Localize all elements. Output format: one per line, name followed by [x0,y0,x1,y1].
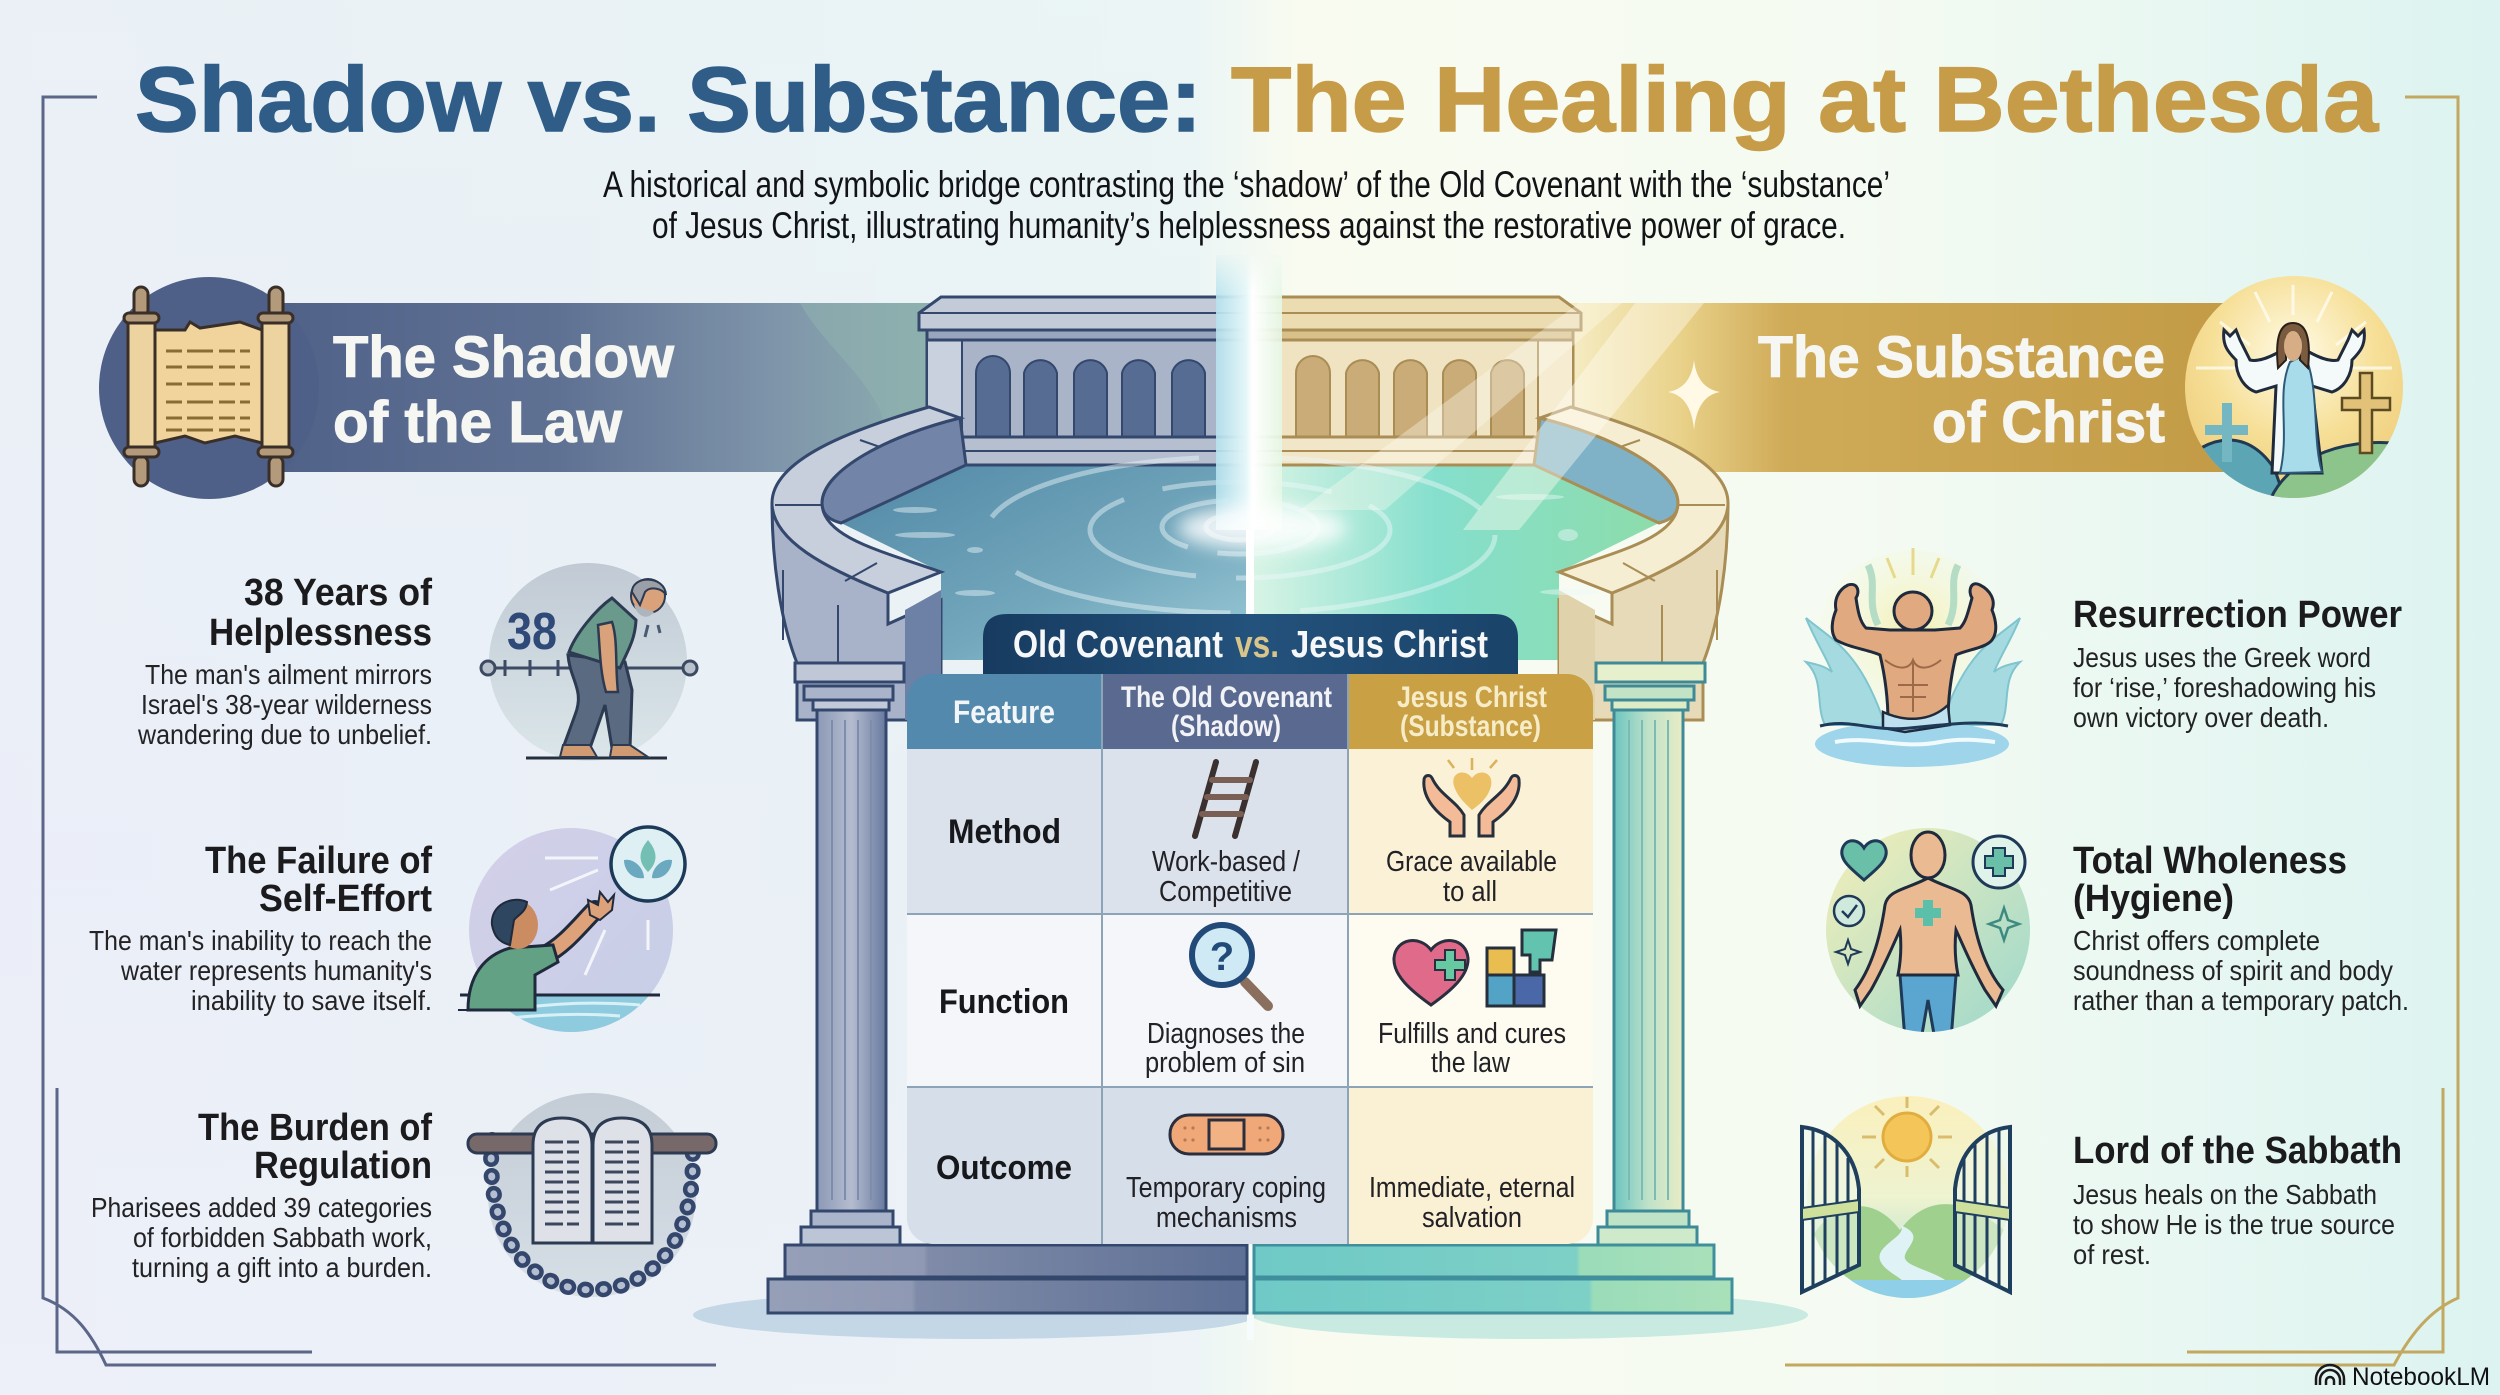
table row: method: Competitive [1159,876,1292,908]
left item: The Burden of Regulation: The Burden of [198,1107,432,1149]
table row: method [948,758,1557,908]
left item: 38 Years of Helplessness: Helplessness [209,612,432,654]
left item: The Burden of Regulation: of forbidden Sabbath work, [133,1222,432,1253]
icon: puzzle pieces [1487,930,1556,1006]
icon: magnifying glass: ? [1210,935,1234,979]
icon: bandage [1170,1115,1283,1154]
left item: The Failure of Self-Effort: inability to save itself. [191,985,432,1016]
left item: The Failure of Self-Effort: The man's inability to reach the [89,925,432,956]
table row: method: Work-based / [1152,846,1301,878]
left item: The Failure of Self-Effort: water represents humanity's [120,955,432,986]
pool: right half, living water [1252,297,1728,720]
icon: chained law tablets [468,1093,716,1297]
right item: Total Wholeness (Hygiene): rather than a temporary patch. [2073,985,2409,1016]
right item: Total Wholeness (Hygiene): soundness of spirit and body [2073,955,2393,986]
icon: figure rising from water [1806,548,2020,767]
steps: left [768,1245,1247,1313]
table row: outcome: mechanisms [1156,1202,1297,1234]
right item: Total Wholeness (Hygiene): Total Wholeness [2073,840,2347,882]
column: left [795,663,904,1245]
table row: function: Function [939,983,1069,1021]
right item: Resurrection Power: for ‘rise,’ foreshadowing his [2073,672,2376,703]
title [135,49,2379,151]
left item: 38 Years of Helplessness: 38 Years of [244,572,432,614]
left item: 38 Years of Helplessness: Israel's 38-year wilderness [141,689,432,720]
icon: risen Christ [2175,276,2410,500]
table header row [953,681,1547,743]
icon: whole body with heart and cross [1826,828,2030,1040]
left item: The Burden of Regulation [91,1093,716,1297]
table row: outcome: salvation [1422,1202,1522,1234]
table row: method: Method [948,813,1061,851]
water: shadow side [841,465,1248,660]
table row: function [939,925,1566,1079]
icon: man reaching for water [458,827,685,1035]
rays of light [1300,303,1704,530]
table row: outcome [936,1115,1575,1234]
banner: The Substance of Christ [1560,276,2410,500]
banner text: of Christ [1932,390,2165,455]
right item: Lord of the Sabbath: of rest. [2073,1239,2151,1270]
water ripples [893,457,1600,613]
table row: function: Diagnoses the [1147,1018,1305,1050]
subtitle: A historical and symbolic bridge contrasting the ‘shadow’ of the Old Covenant with the ‘substance’ [603,164,1890,205]
subtitle: of Jesus Christ, illustrating humanity’s helplessness against the restorative power of grace. [652,205,1846,246]
table header row: Feature [953,694,1055,730]
banner: The Shadow of the Law [99,277,960,499]
table header row: (Shadow) [1171,710,1281,743]
right item: Total Wholeness (Hygiene): (Hygiene) [2073,878,2234,920]
icon: open gates with sun and river [1802,1096,2010,1300]
left item: The Burden of Regulation: Regulation [254,1145,432,1187]
decorative frame: left [43,97,716,1365]
right item: Lord of the Sabbath: Jesus heals on the Sabbath [2073,1179,2377,1210]
comparison table title: vs. [1235,624,1279,666]
left item: The Burden of Regulation: turning a gift into a burden. [132,1252,432,1283]
subtitle [603,164,1890,246]
table header row: The Old Covenant [1121,681,1332,714]
right item: Resurrection Power: own victory over death. [2073,702,2329,733]
table row: method: to all [1443,876,1497,908]
left item: 38 Years of Helplessness: The man's ailment mirrors [145,659,432,690]
left item: The Burden of Regulation: Pharisees added 39 categories [91,1192,432,1223]
table row: outcome: Outcome [936,1149,1072,1187]
right item: Lord of the Sabbath: to show He is the true source [2073,1209,2395,1240]
table row: function: problem of sin [1145,1047,1305,1079]
table row: outcome: Immediate, eternal [1369,1172,1575,1204]
table header row: Jesus Christ [1397,681,1547,714]
steps: right [1254,1245,1732,1313]
basin inner wall [1534,418,1678,523]
icon: hands holding heart [1424,758,1519,836]
right item: Resurrection Power: Jesus uses the Greek word [2073,642,2371,673]
stone rim [1540,407,1728,720]
pool: left half, old covenant [772,297,1248,720]
icon: bent man with 38 timeline [481,563,697,761]
table row: function: Fulfills and cures [1378,1018,1566,1050]
water: substance side [1252,465,1659,660]
right item: Resurrection Power [1806,548,2402,767]
left item: The Failure of Self-Effort: Self-Effort [259,878,432,920]
icon: sparkle [1668,360,1720,430]
comparison table [907,674,1593,1244]
title: The Healing at Bethesda [1231,49,2379,151]
ground shadow [693,1291,1808,1339]
comparison table title: Old Covenant [1013,624,1223,666]
right item: Lord of the Sabbath [1802,1096,2402,1300]
decorative frame: right [1785,97,2458,1365]
banner text [1758,325,2165,455]
icon: ladder [1195,762,1256,836]
comparison table title: Jesus Christ [1291,624,1488,666]
left item: 38 Years of Helplessness: wandering due to unbelief. [137,719,432,750]
table row: method: Grace available [1386,846,1557,878]
banner text: of the Law [333,390,623,455]
title: Shadow vs. Substance: [135,49,1202,151]
banner text: The Shadow [333,325,675,390]
right item: Total Wholeness (Hygiene): Christ offers complete [2073,925,2320,956]
icon: NotebookLM mark [2316,1365,2344,1385]
stone rim [772,407,960,720]
banner text: The Substance [1758,325,2165,390]
bath house colonnade [1252,297,1581,465]
icon: heart with plus [1394,941,1468,1005]
icon: bent man with 38 timeline: 38 [507,603,557,661]
Christ: robe and raised arms [2224,330,2364,473]
left item: 38 Years of Helplessness [137,563,697,761]
comparison table title [983,614,1518,680]
table header row: (Substance) [1400,710,1541,743]
right item: Resurrection Power: Resurrection Power [2073,594,2402,636]
NotebookLM watermark: NotebookLM [2352,1363,2490,1391]
central beam of light [1177,255,1347,1340]
left item: The Failure of Self-Effort [89,827,685,1035]
banner text [333,325,675,455]
right item: Lord of the Sabbath: Lord of the Sabbath [2073,1130,2402,1172]
left item: The Failure of Self-Effort: The Failure of [205,840,432,882]
basin inner wall [822,418,966,523]
table row: function: the law [1431,1047,1511,1079]
icon: magnifying glass [1192,925,1268,1006]
bath house colonnade [919,297,1248,465]
column: right [1596,663,1705,1245]
table row: outcome: Temporary coping [1126,1172,1326,1204]
icon: scroll of the law [99,277,319,499]
right item: Total Wholeness (Hygiene) [1826,828,2409,1040]
